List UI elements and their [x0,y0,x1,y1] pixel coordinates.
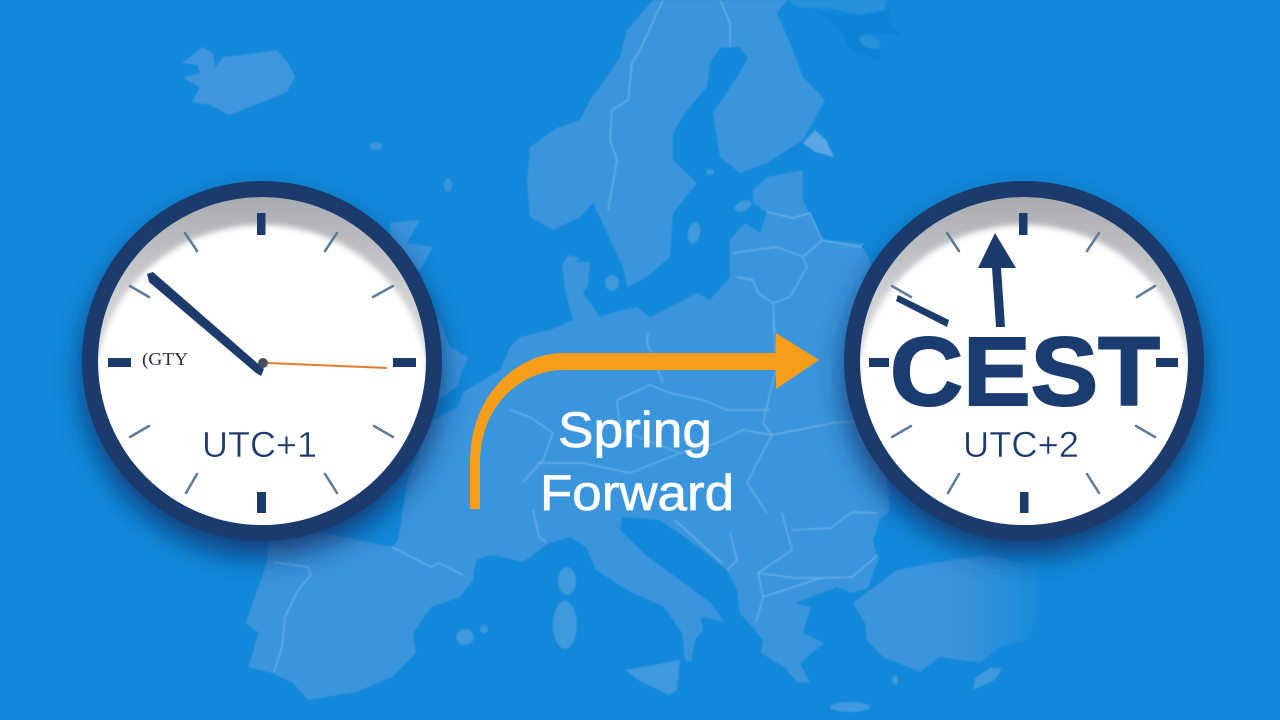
CEST label: CEST [890,317,1160,426]
map: Turkey [853,555,1040,672]
minor ticks [892,233,1155,493]
UTC+1 label: UTC+1 [202,424,317,465]
map: mainland Europe [246,170,890,700]
caption line 1: Spring [558,402,712,458]
second hand [268,363,387,368]
clock ring [844,181,1204,541]
minor ticks [130,233,393,493]
map: White Sea [815,7,902,60]
map: British Isles [370,142,468,398]
map of Europe [182,0,1040,712]
UTC+2 label: UTC+2 [963,424,1079,465]
map: Karelian isthmus [803,130,834,157]
caption: Spring Forward [540,402,734,521]
map: Onega peninsula [858,33,882,51]
zone label: garbled CET text: (GTY [142,349,188,370]
spring forward arrow [470,333,819,509]
short hand [896,295,949,327]
map: Scandinavia [527,0,825,287]
caption line 2: Forward [540,465,734,521]
clock ring [82,181,442,541]
map: islands [456,169,1002,712]
hour ticks [869,213,1178,513]
arrow hand [978,233,1016,327]
map: Kola shore [787,0,887,15]
clock: CEST, right [844,181,1204,556]
clock shadow [844,196,1204,556]
clock pivot [258,358,268,368]
minute hand [147,272,264,376]
map: country borders [274,0,878,672]
hour ticks [108,213,416,513]
clock shadow [82,196,442,556]
clock dial [96,197,428,545]
clock: CET, left [82,181,442,556]
clock dial [858,197,1190,545]
map: Iceland [182,47,295,115]
